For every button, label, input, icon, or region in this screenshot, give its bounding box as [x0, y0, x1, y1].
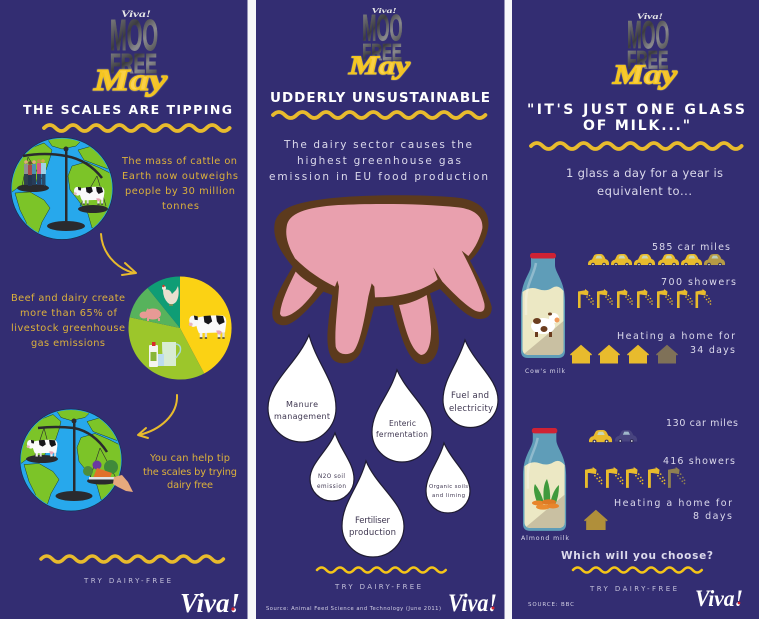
logo: Moo Free May: FREE: [110, 48, 157, 79]
panel: udderly unsustainable: [256, 0, 504, 619]
wave divider: [41, 556, 223, 562]
stat: 416 showers: [585, 456, 735, 488]
stat: 416 showers: 416 showers: [663, 456, 735, 467]
wave divider: [317, 568, 446, 572]
stat: heating 8 days: [585, 498, 732, 530]
drop: enteric fermentation: [372, 370, 432, 462]
logo: Moo Free May: MOO: [627, 14, 669, 57]
pie chart: livestock emissions: [128, 276, 232, 380]
drop: organic soils and liming: Organic soils: [429, 484, 468, 490]
text: tip the scales: [143, 453, 237, 491]
label: almond milk: Almond milk: [521, 535, 569, 542]
text: tip the scales: You can help tip: [149, 453, 230, 464]
illustration: globe scale, people outweighed by cattle: [8, 136, 116, 240]
logo: Moo Free May: MOO: [362, 8, 403, 49]
stat: 700 showers: 700 showers: [661, 277, 736, 288]
stat: 130 car miles: [589, 418, 738, 444]
logo: Moo Free May: [348, 6, 411, 80]
logo: Moo Free May: [612, 12, 678, 89]
text: one glass a day: equivalent to...: [597, 184, 692, 198]
logo: Moo Free May: Viva!: [372, 6, 397, 15]
illustration: udder: [272, 195, 492, 364]
drop: fuel and electricity: Fuel and: [451, 391, 489, 401]
wave divider: [531, 143, 742, 149]
people: [24, 159, 46, 186]
logo: Moo Free May: May: [348, 51, 411, 80]
heading: "IT'S JUST ONE GLASS: [527, 102, 745, 118]
text: mass of cattle: people by 30 million: [125, 186, 235, 197]
stat: 130 car miles: 130 car miles: [666, 418, 738, 429]
logo: Moo Free May: May: [612, 59, 678, 89]
text: greenhouse gas statement: highest greenhouse gas: [297, 155, 461, 167]
heading: THE SCALES ARE TIPPING: [23, 102, 232, 117]
food plate: [83, 460, 118, 480]
logo: Moo Free May: May: [93, 62, 167, 97]
drop: enteric fermentation: Enteric: [389, 419, 416, 428]
text: mass of cattle: tonnes: [162, 201, 199, 212]
stat: heating 34 days: [570, 331, 735, 364]
text: beef and dairy: Beef and dairy create: [11, 293, 125, 304]
text: one glass a day: [566, 166, 723, 198]
text: mass of cattle: Earth now outweighs: [122, 171, 238, 182]
drop: N2O soil emission: [310, 433, 354, 501]
logo: Viva!: Viva!: [695, 586, 743, 611]
text: greenhouse gas statement: The dairy sector causes the: [283, 139, 472, 151]
drop: manure management: Manure: [286, 400, 318, 409]
panel: the scales are tipping: [0, 0, 248, 619]
call to action: TRY DAIRY-FREE: [83, 577, 171, 585]
text: beef and dairy: gas emissions: [31, 338, 105, 349]
drop: fertiliser production: Fertiliser: [355, 516, 390, 526]
drop: N2O soil emission: N2O soil: [318, 474, 345, 480]
stat: heating 34 days: 34 days: [690, 345, 735, 356]
drop: fertiliser production: production: [349, 528, 396, 538]
call to action: TRY DAIRY-FREE: [589, 585, 677, 593]
heading: [527, 102, 745, 134]
text: greenhouse gas statement: [269, 139, 488, 183]
logo: Moo Free May: Viva!: [121, 9, 151, 19]
text: tip the scales: the scales by trying: [143, 467, 237, 478]
logo: Viva!: Viva!: [180, 588, 240, 618]
icon: almonds and leaves: [532, 479, 559, 510]
icon: cow: [189, 315, 226, 339]
arrow to globe: [138, 395, 177, 438]
drop: fuel and electricity: electricity: [449, 404, 493, 414]
question: Which will you choose?: [561, 550, 713, 562]
icon: cow's milk bottle: [521, 253, 565, 358]
stat: heating 8 days: 8 days: [693, 511, 732, 522]
stat: heating 8 days: Heating a home for: [614, 498, 732, 509]
logo: Moo Free May: MOO: [110, 11, 158, 60]
icon: pig: [140, 308, 161, 321]
text: tip the scales: dairy free: [167, 480, 213, 491]
call to action: TRY DAIRY-FREE: [334, 583, 421, 591]
wave divider: [44, 125, 230, 131]
arrow to pie chart: [101, 234, 136, 275]
label: cow's milk: Cow's milk: [525, 368, 566, 375]
drop: enteric fermentation: fermentation: [376, 430, 428, 439]
logo: Moo Free May: [93, 9, 167, 97]
cow: [74, 187, 104, 205]
drop: N2O soil emission: emission: [317, 484, 346, 490]
text: beef and dairy: livestock greenhouse: [11, 323, 125, 334]
drop: manure management: [268, 335, 336, 442]
logo: Moo Free May: FREE: [627, 47, 668, 74]
stat: heating 34 days: Heating a home for: [617, 331, 735, 342]
heading: OF MILK...": [583, 118, 690, 134]
drop: manure management: management: [274, 412, 330, 421]
wave divider: [573, 568, 702, 572]
icon: chicken: [162, 285, 179, 306]
logo: Viva!: Viva!: [448, 590, 497, 617]
text: mass of cattle: [121, 156, 238, 212]
source: SOURCE: BBC: [528, 602, 574, 608]
text: beef and dairy: [11, 293, 125, 349]
stat: 585 car miles: [588, 242, 730, 266]
cow: [27, 440, 57, 458]
icon: almond milk bottle: [523, 428, 566, 531]
text: greenhouse gas statement: emission in EU food production: [269, 171, 488, 183]
drop: organic soils and liming: [426, 443, 470, 513]
icon: cow on bottle: [531, 312, 560, 337]
text: mass of cattle: The mass of cattle on: [121, 156, 237, 167]
hand: [113, 475, 133, 492]
stat: 585 car miles: 585 car miles: [652, 242, 730, 253]
stat: 700 showers: [578, 277, 736, 308]
illustration: globe scale, cattle balanced with plant food: [17, 408, 133, 511]
source: Source: Animal Feed Science and Technology (June 2011): [266, 606, 441, 612]
wave divider: [273, 112, 485, 118]
drop: fertiliser production: [342, 461, 404, 557]
logo: Moo Free May: FREE: [362, 39, 402, 65]
text: beef and dairy: more than 65% of: [20, 308, 118, 319]
icon: milk jug and bottle: [149, 342, 180, 367]
panel: just one glass of milk: [512, 0, 759, 619]
drop: organic soils and liming: and liming: [432, 493, 465, 499]
heading: UDDERLY UNSUSTAINABLE: [270, 90, 490, 106]
drop: fuel and electricity: [443, 340, 498, 428]
text: one glass a day: 1 glass a day for a year is: [566, 166, 723, 180]
logo: Moo Free May: Viva!: [637, 12, 663, 21]
